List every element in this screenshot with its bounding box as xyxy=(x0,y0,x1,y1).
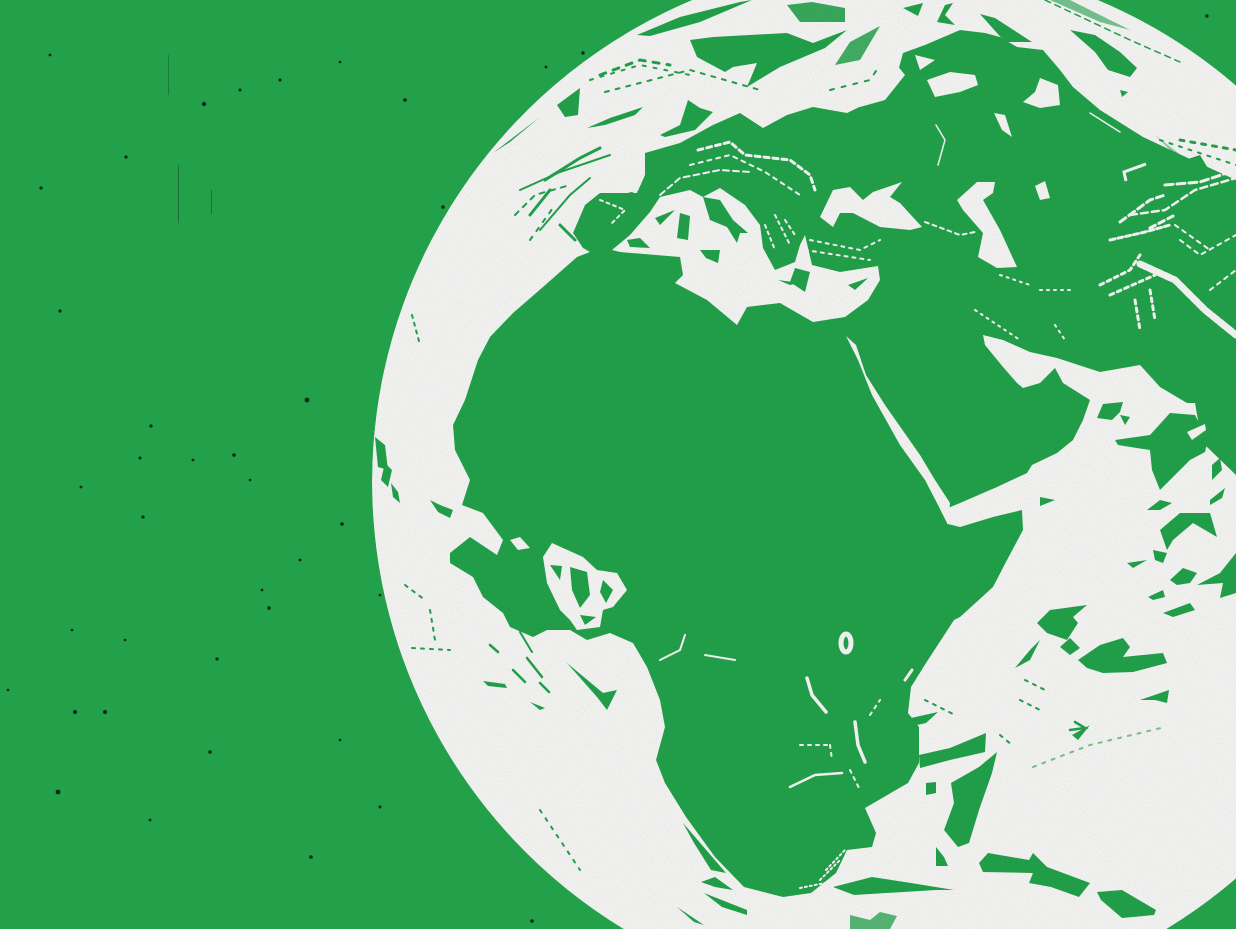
paper grain texture xyxy=(372,0,1236,929)
clouds off Mozambique and the Cape xyxy=(677,712,1156,929)
Black Sea xyxy=(820,182,922,230)
Aral Sea xyxy=(1035,181,1050,200)
African lakes and rivers xyxy=(660,634,912,888)
Caspian Sea xyxy=(957,182,1017,268)
white lake in Gujarat cloud xyxy=(1187,424,1206,440)
Central Asian and Himalayan snow streaks xyxy=(975,170,1236,340)
globe xyxy=(372,0,1236,929)
landmass: Africa, Arabia, Europe and Asia xyxy=(450,30,1236,897)
Atlantic streak clouds off Iberia xyxy=(515,0,1236,240)
thin streaks south of the Guinea coast xyxy=(405,315,580,870)
Italy and Mediterranean islands xyxy=(627,197,868,292)
dotted cloud trails in the Indian Ocean xyxy=(925,680,1161,767)
mountain snow streaks: Alps, Carpathians, Balkans, Turkey xyxy=(600,113,1120,260)
Arctic and north Atlantic clouds xyxy=(493,0,1212,178)
Lake Balkhash xyxy=(1124,164,1146,181)
Atlantic clouds along the western limb xyxy=(375,437,617,710)
Madagascar xyxy=(944,752,997,847)
west African coastal cloud patch xyxy=(543,543,627,630)
Mediterranean Sea xyxy=(612,188,880,325)
northern cloud holes over Russia xyxy=(860,55,1060,137)
white ocean disc xyxy=(372,0,1236,929)
Arabian Sea and Indian cloud masses xyxy=(1015,402,1236,740)
small white clouds along the Guinea coast xyxy=(510,537,530,550)
Red Sea xyxy=(846,336,950,525)
